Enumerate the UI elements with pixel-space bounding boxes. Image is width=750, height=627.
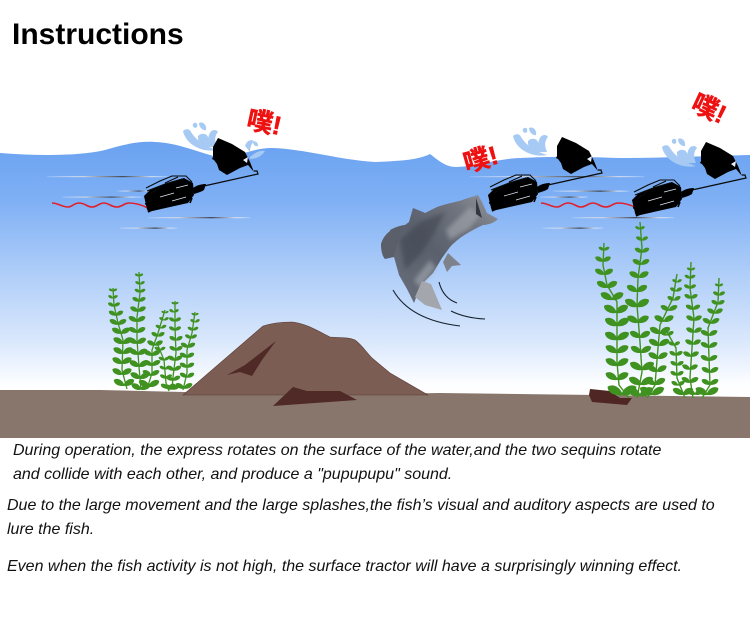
red wave: right <box>541 203 637 208</box>
fish jumping <box>381 195 498 326</box>
sound effect 2: 噗! <box>460 140 501 178</box>
text: operation line 2: and collide with each other, and produce a "pupupupu" sound. <box>13 466 452 483</box>
splash 3 <box>662 138 697 167</box>
splash 1 right <box>245 140 265 159</box>
title: Instructions <box>12 18 184 51</box>
text: movement paragraph: Due to the large movement and the large splashes,the fish’s visual and auditory aspects are used to <box>7 497 715 514</box>
text: movement paragraph <box>7 497 715 538</box>
speed lines: right lures <box>470 176 674 229</box>
red wave: left <box>52 203 148 208</box>
text: operation line 1: During operation, the express rotates on the surface of the water,and the two sequins rotate <box>13 442 661 459</box>
small rock <box>589 389 632 405</box>
text: activity paragraph: Even when the fish activity is not high, the surface tractor will have a surprisingly winning effect. <box>7 558 682 575</box>
lure 3 <box>632 142 746 216</box>
sound effect 1: 噗! <box>244 104 284 141</box>
speed lines: left lure <box>47 176 250 229</box>
lure 1 <box>144 138 258 212</box>
lure 2 <box>488 137 602 211</box>
sound effect 3: 噗! <box>687 88 731 130</box>
text: movement paragraph: lure the fish. <box>7 521 94 538</box>
plants: left cluster <box>108 272 200 391</box>
rock mound <box>183 322 428 406</box>
water <box>0 142 750 398</box>
splash 2 <box>513 127 548 156</box>
plants: right cluster <box>595 222 725 398</box>
ground <box>0 390 750 438</box>
splash 1 <box>183 122 218 151</box>
